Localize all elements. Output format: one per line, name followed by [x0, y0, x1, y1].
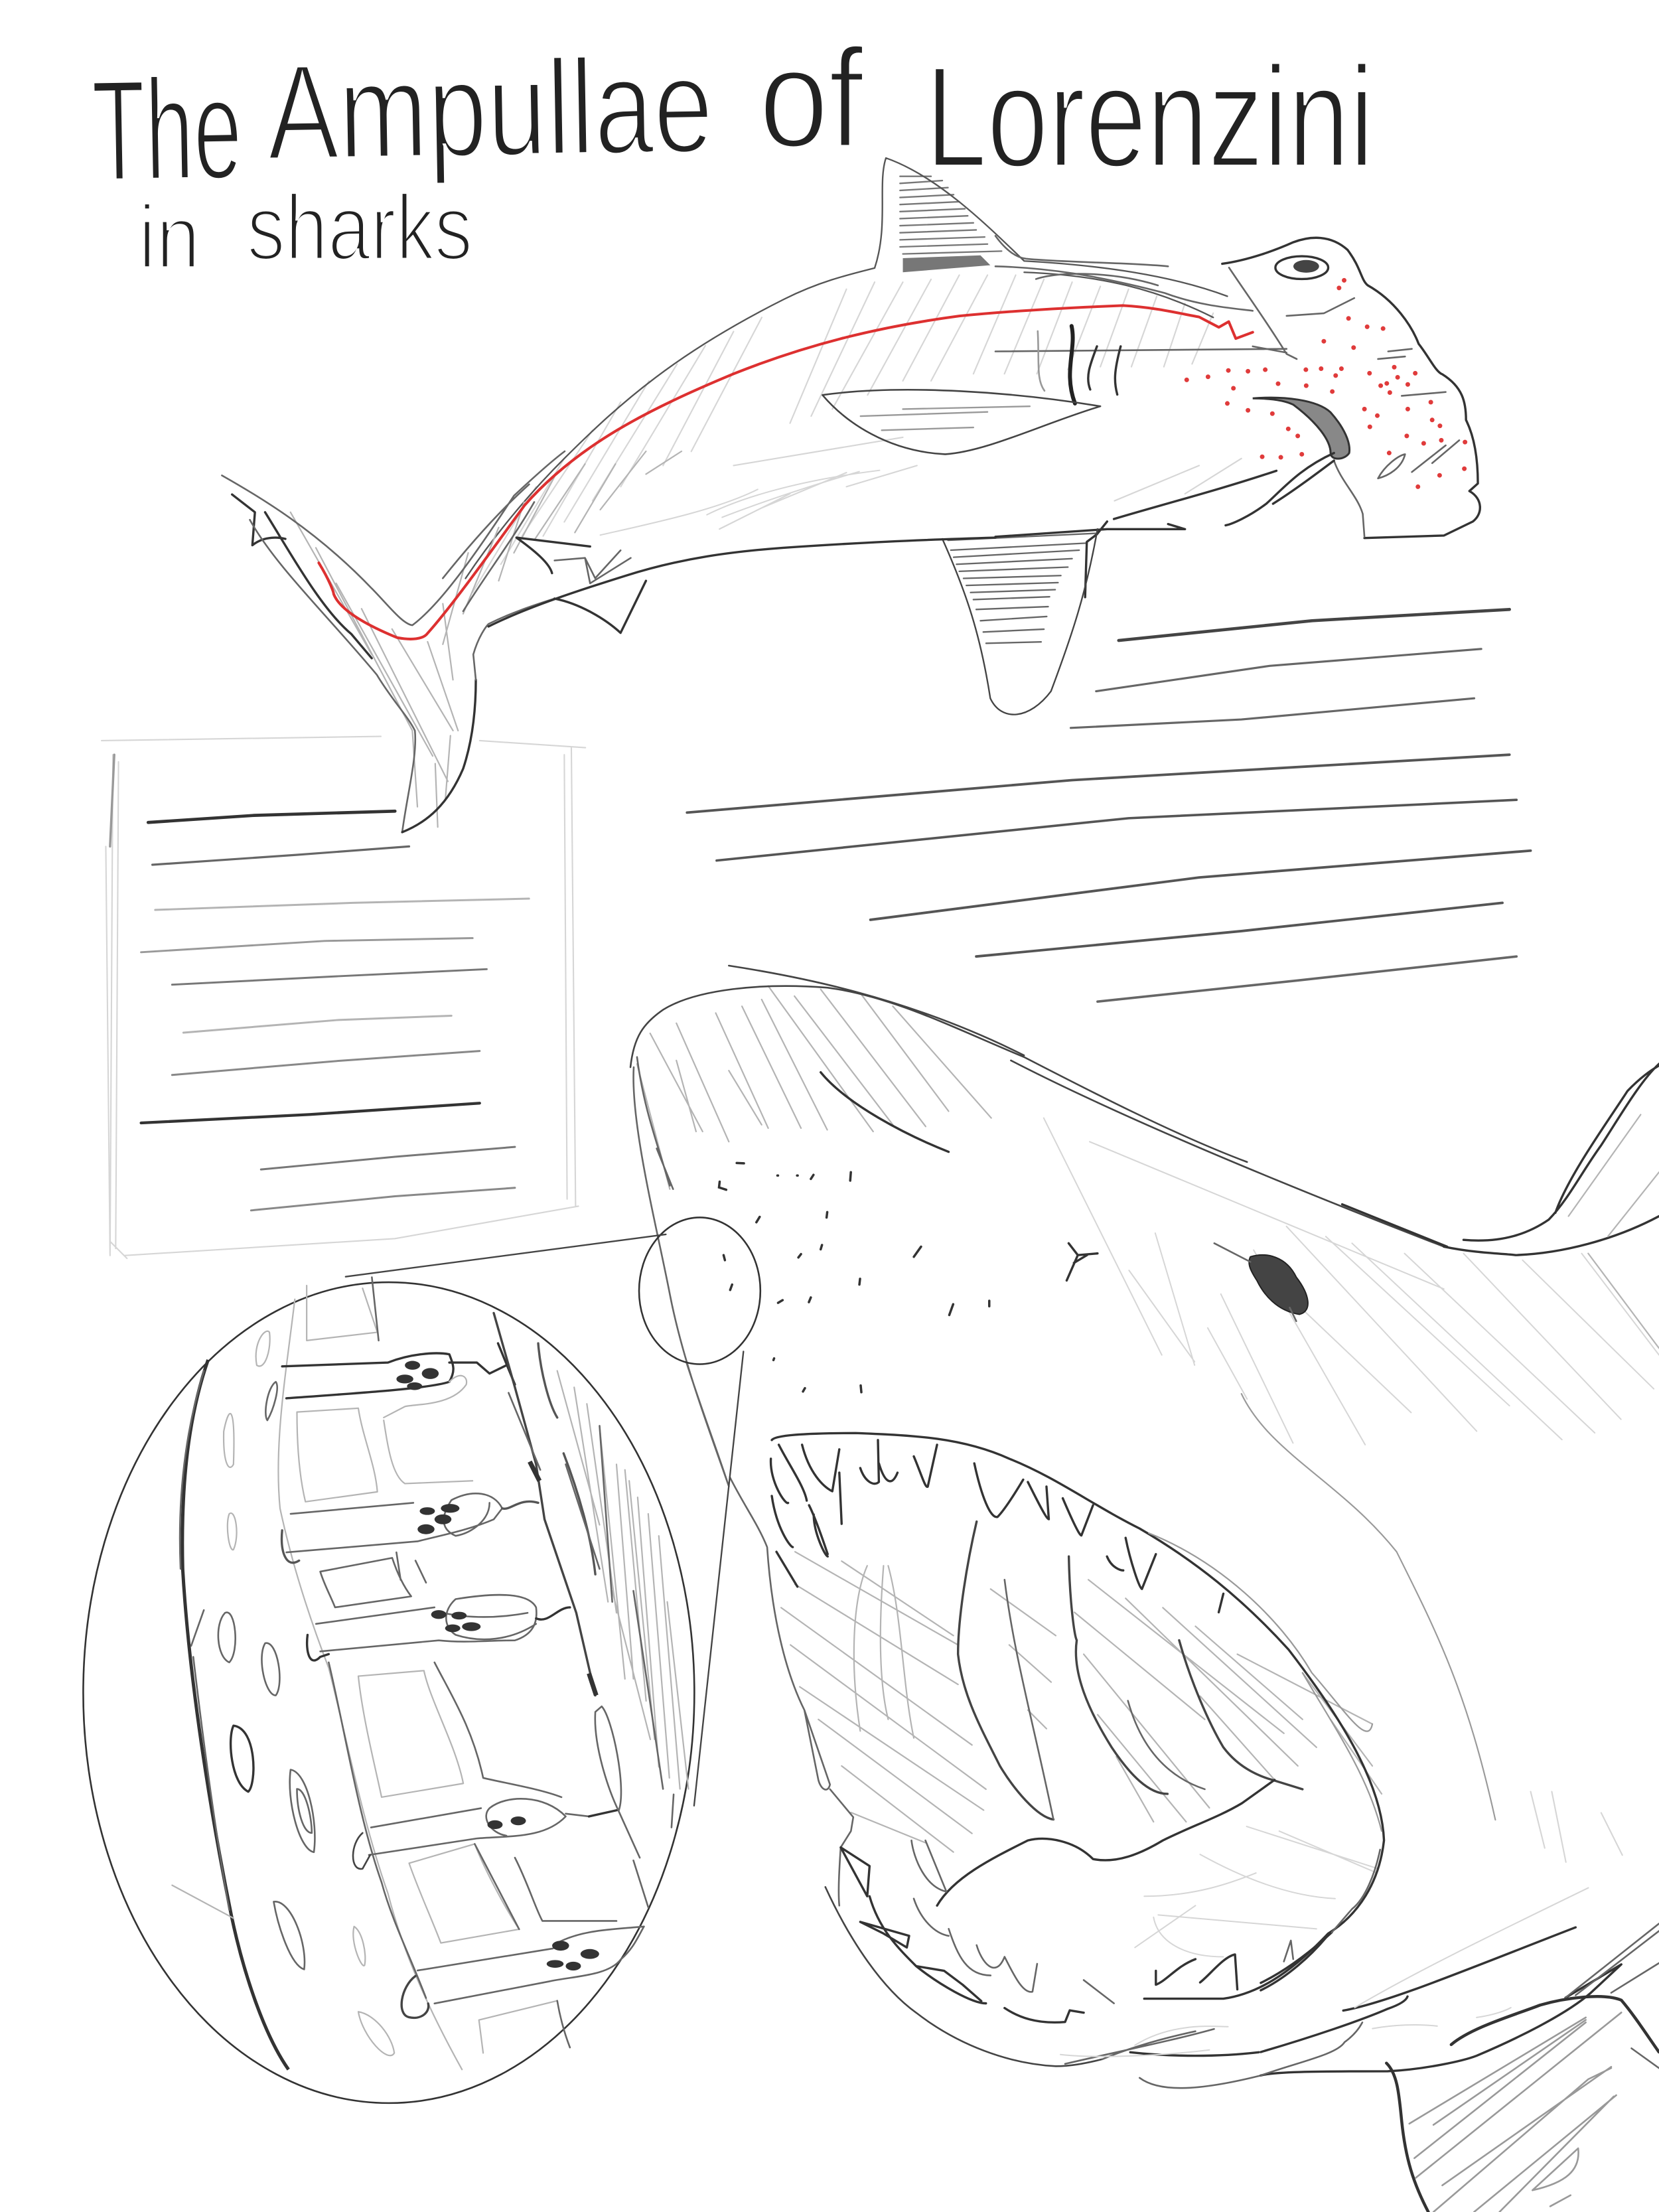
red electroreceptor dots: [1187, 280, 1465, 486]
mouth interior folds: [958, 1522, 1303, 1820]
shark head outline: [995, 236, 1480, 597]
mouth and jaw: [730, 1433, 1384, 2088]
upper teeth: [771, 1440, 1224, 1612]
tongue: [937, 1780, 1275, 1905]
title word: of: of: [759, 20, 864, 177]
jaw connecting lines: [1130, 2052, 1259, 2056]
surface pores: [224, 1331, 394, 2055]
inner nerve line: [494, 1313, 595, 1696]
top-right text placeholder lines: [687, 609, 1531, 1001]
ampulla canal 2: [287, 1493, 502, 1552]
title: [91, 20, 1374, 287]
tissue blocks: [297, 1286, 557, 2053]
lateral line in red: [319, 305, 1253, 639]
ampullae pores on snout: [719, 1163, 989, 1392]
subtitle word: in: in: [138, 186, 200, 287]
second dorsal fin edge: [1463, 1064, 1659, 1240]
title word: Ampullae: Ampullae: [266, 30, 714, 188]
tail and rear body: [222, 451, 995, 832]
great white shark illustration: [630, 966, 1659, 2212]
shark back and dorsal fin outline: [466, 158, 1227, 579]
ampullary cluster dots: [396, 1361, 599, 1970]
cheek line: [1242, 1394, 1495, 1820]
back outline: [630, 966, 1444, 1246]
inner skin band: [538, 1343, 595, 1574]
lower jaw outline: [826, 1887, 1102, 2066]
dermal layer boundary: [278, 1299, 462, 2069]
panel frame: [102, 737, 585, 1258]
throat outline: [995, 453, 1334, 597]
subtitle word: sharks: sharks: [247, 175, 472, 279]
face outline: [634, 1057, 729, 1487]
dorsal fin hatching and shadow: [900, 177, 1001, 254]
pectoral fin: [822, 390, 1100, 454]
title word: Lorenzini: Lorenzini: [926, 37, 1374, 197]
magnified inset of skin cross-section: [83, 1278, 694, 2103]
lower teeth: [841, 1848, 1238, 2022]
second dorsal fin hatching: [1569, 1114, 1659, 1348]
back lines: [995, 236, 1253, 311]
jaw lines: [1261, 1927, 1621, 2075]
anal fin hatching: [948, 533, 1098, 643]
pectoral fin edge: [1386, 1996, 1659, 2212]
body hatching: [1044, 1118, 1659, 1445]
ampulla canal 4: [369, 1799, 589, 1855]
anal fin: [942, 529, 1098, 715]
muscle hatching: [557, 1370, 688, 1789]
great white eye: [1214, 1243, 1308, 1321]
hammerhead shark illustration: [222, 158, 1480, 832]
hammerhead eye: [1275, 256, 1329, 279]
gill slits: [1038, 331, 1045, 391]
lower jaw and pectoral fin: [1261, 1850, 1659, 2212]
pectoral fin hatching: [861, 406, 1030, 430]
mouth hatching: [781, 1552, 1382, 1852]
pectoral fin hatching: [1409, 2012, 1621, 2212]
snout hatching: [637, 986, 991, 1189]
nostril: [1066, 1243, 1098, 1280]
ampulla canal 5: [417, 1927, 644, 2004]
inset ellipse: [83, 1282, 694, 2103]
head and back in detail: [630, 966, 1659, 1487]
panel text lines: [148, 811, 395, 822]
ampulla canal 1: [282, 1343, 515, 1398]
title word: The: The: [91, 48, 243, 211]
cheek edge: [730, 1477, 853, 1905]
callout: magnified area circle and leader lines: [346, 1217, 760, 1806]
jaw: [1253, 398, 1350, 459]
shark body hatching: [472, 275, 1242, 593]
ampulla canal 3: [316, 1595, 536, 1651]
left text panel: [102, 737, 585, 1258]
outer skin edge: [182, 1360, 289, 2069]
rear flank hatching: [1531, 1792, 1623, 1862]
upper jaw: [772, 1433, 1384, 1999]
